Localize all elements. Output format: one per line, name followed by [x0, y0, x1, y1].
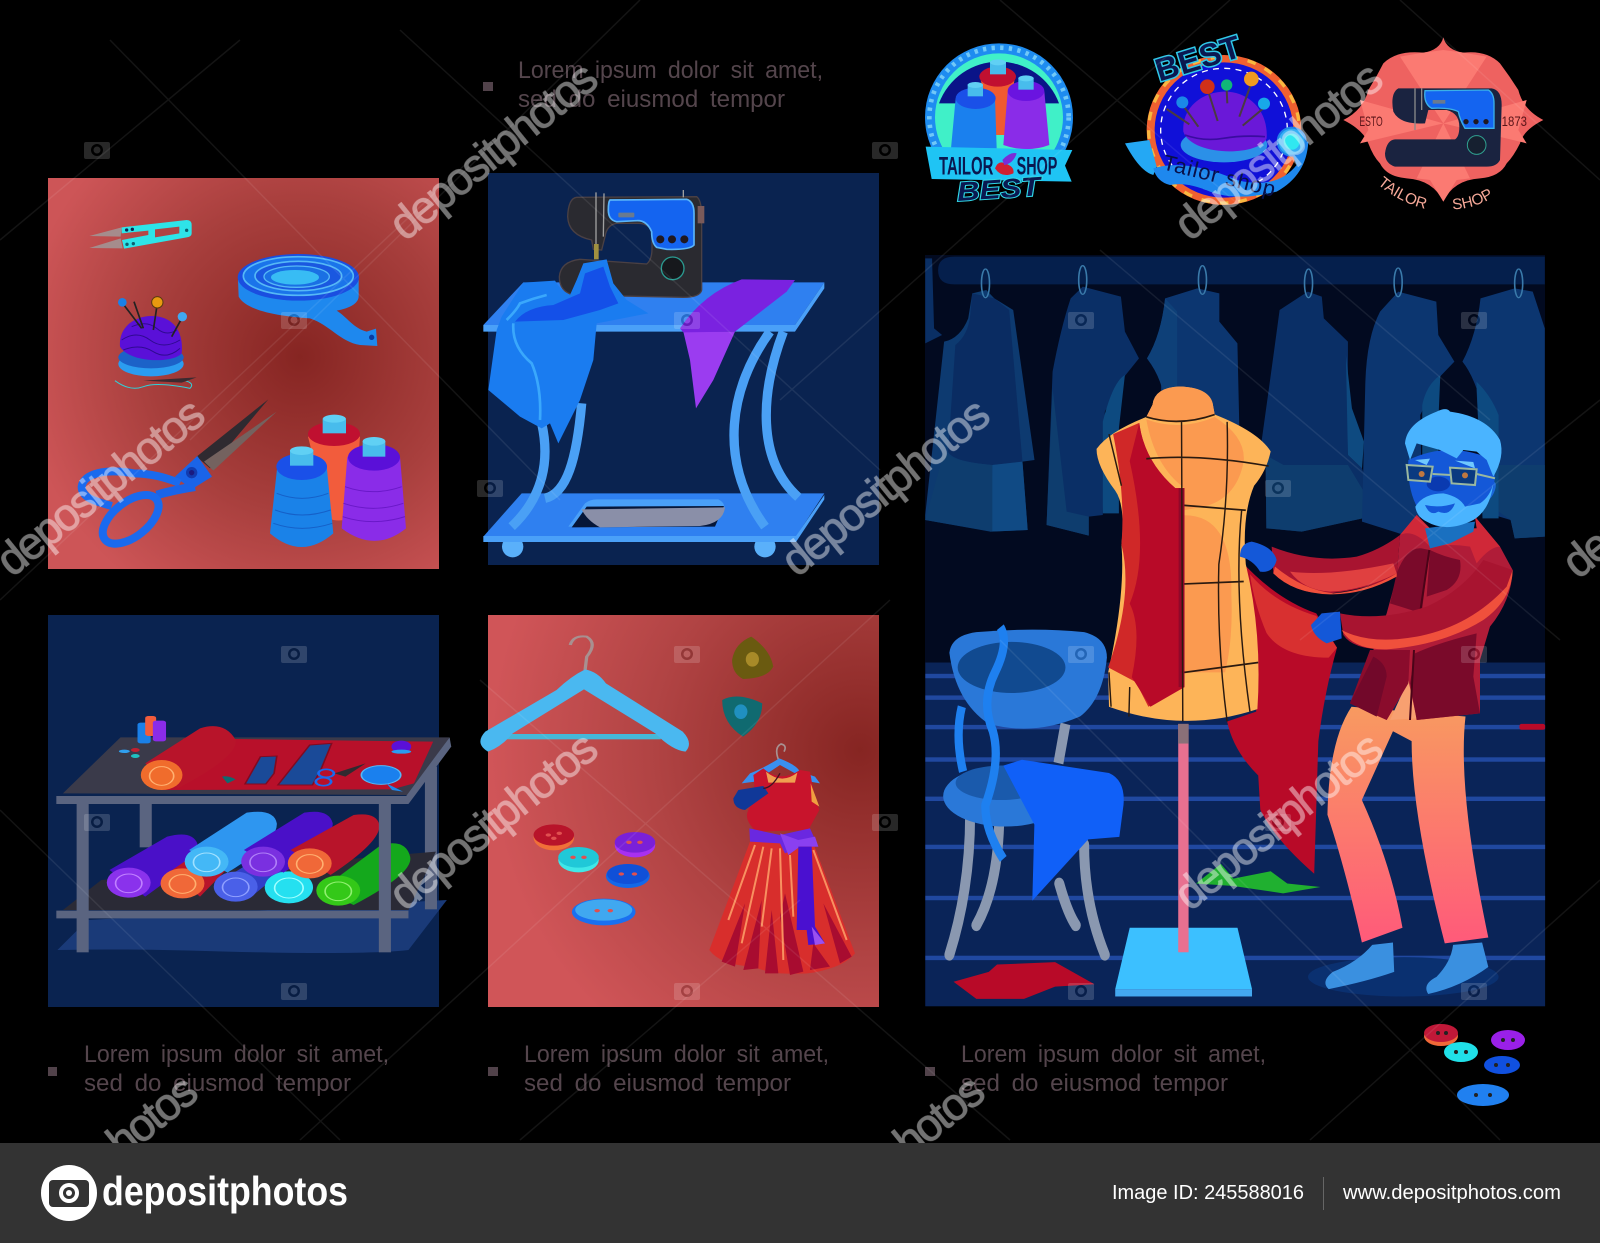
- tool illustrations: [82, 220, 406, 553]
- icon: scissors: [82, 399, 277, 553]
- caption: top panel text: sed do eiusmod tempor: [518, 86, 785, 113]
- lower shelf: [56, 852, 436, 918]
- badge: tailor shop best: TAILOR: [939, 153, 993, 180]
- hanger, chalk and buttons illustration: [480, 636, 773, 925]
- watermark: depositphotos text: depositphotos: [1164, 52, 1392, 250]
- caption: lower left text: Lorem ipsum dolor sit amet,: [84, 1041, 389, 1068]
- badge: sewing machine esto 1873: 1873: [1502, 113, 1527, 129]
- icon: hanger: [480, 636, 689, 752]
- icon: thread spools: [270, 415, 406, 547]
- floor shadow: [57, 900, 447, 953]
- icon: dress: [709, 744, 855, 975]
- panel: sewing machine table: [483, 173, 879, 565]
- table top: [483, 282, 824, 332]
- blue fabric: [488, 259, 648, 443]
- hanging garments: [925, 258, 1545, 538]
- footer bar: [0, 1143, 1600, 1243]
- watermark: depositphotos text: depositphotos: [1164, 722, 1392, 920]
- watermark: depositphotos text: depositphotos: [379, 722, 607, 920]
- badge: tailor shop best: BEST: [956, 171, 1044, 207]
- footer logo: [41, 1165, 348, 1221]
- tailor shoes: [1325, 942, 1488, 994]
- watermark: camera marks: [84, 142, 1487, 1000]
- table legs: [512, 332, 798, 527]
- fabric rolls: [107, 812, 410, 906]
- panel: fabric table: [48, 615, 451, 1007]
- caption: lower right text: sed do eiusmod tempor: [961, 1070, 1228, 1097]
- mannequin with drape: [1097, 387, 1337, 874]
- icon: buttons: [534, 824, 655, 925]
- tailor hands: [1240, 542, 1342, 643]
- floor fabric scraps: [954, 724, 1545, 999]
- tailor head: [1405, 409, 1501, 548]
- footer image id: Image ID: 245588016: [1112, 1182, 1304, 1204]
- purple fabric: [680, 279, 795, 408]
- icon: sewing machine: [559, 190, 704, 297]
- badge: sewing machine esto 1873: [1344, 38, 1544, 210]
- icon: seam ripper: [89, 220, 192, 249]
- icon: loose buttons: [1424, 1024, 1525, 1106]
- badge: sewing machine esto 1873: TAILOR: [1380, 176, 1426, 209]
- watermark: depositphotos text: depositphotos: [771, 388, 999, 586]
- icon: tailor chalk teal: [722, 697, 762, 737]
- icon: tailor chalk olive: [732, 637, 773, 679]
- items on table: [119, 716, 411, 792]
- caption: lower left text: [48, 1041, 389, 1097]
- panel: sewing tools: [48, 178, 439, 569]
- mannequin stand: [1115, 724, 1252, 996]
- lower shelf: [483, 493, 824, 542]
- wardrobe rail and garments: [925, 257, 1545, 538]
- sewing machine and table illustration: [483, 190, 824, 557]
- badge: sewing machine esto 1873: SHOP: [1453, 189, 1490, 210]
- caption: lower centre text: [488, 1041, 829, 1097]
- caption: lower right text: [925, 1041, 1266, 1097]
- caption: lower centre text: Lorem ipsum dolor sit amet,: [524, 1041, 829, 1068]
- caption: lower right text: Lorem ipsum dolor sit amet,: [961, 1041, 1266, 1068]
- panel: tailor at work: [925, 255, 1545, 1006]
- caption: lower left text: sed do eiusmod tempor: [84, 1070, 351, 1097]
- caption: lower centre text: sed do eiusmod tempor: [524, 1070, 791, 1097]
- table top: [56, 737, 451, 804]
- clothes rail: [938, 257, 1545, 284]
- tailor jacket: [1272, 515, 1513, 720]
- front table legs: [77, 804, 391, 952]
- tailor legs: [1327, 707, 1488, 943]
- badge: best tailor shop: [1125, 28, 1308, 205]
- caption: top panel text: [483, 57, 823, 113]
- tailor upper body: [1240, 409, 1513, 720]
- fabric table illustration: [56, 716, 451, 953]
- badge: sewing machine esto 1873: ESTO: [1359, 113, 1383, 129]
- icon: measuring tape: [238, 254, 377, 346]
- badge: best tailor shop: Tailor shop: [1160, 150, 1278, 202]
- footer logo: depositphotos: [102, 1168, 348, 1214]
- floor: [925, 663, 1545, 1006]
- caption: top panel text: Lorem ipsum dolor sit amet,: [518, 57, 823, 84]
- chair: [943, 627, 1124, 955]
- table wheels: [502, 536, 776, 557]
- watermark: depositphotos text: depositphotos: [379, 52, 607, 250]
- badge: tailor shop best: [925, 43, 1073, 207]
- badge: tailor shop best: SHOP: [1017, 153, 1057, 180]
- panel: hanger, buttons and dress: [480, 615, 879, 1007]
- badge: best tailor shop: BEST: [1151, 28, 1245, 88]
- back table legs: [140, 767, 437, 909]
- icon: pin cushion: [115, 297, 197, 388]
- tailor scene illustration: [925, 387, 1545, 1006]
- footer url: www.depositphotos.com: [1342, 1182, 1561, 1204]
